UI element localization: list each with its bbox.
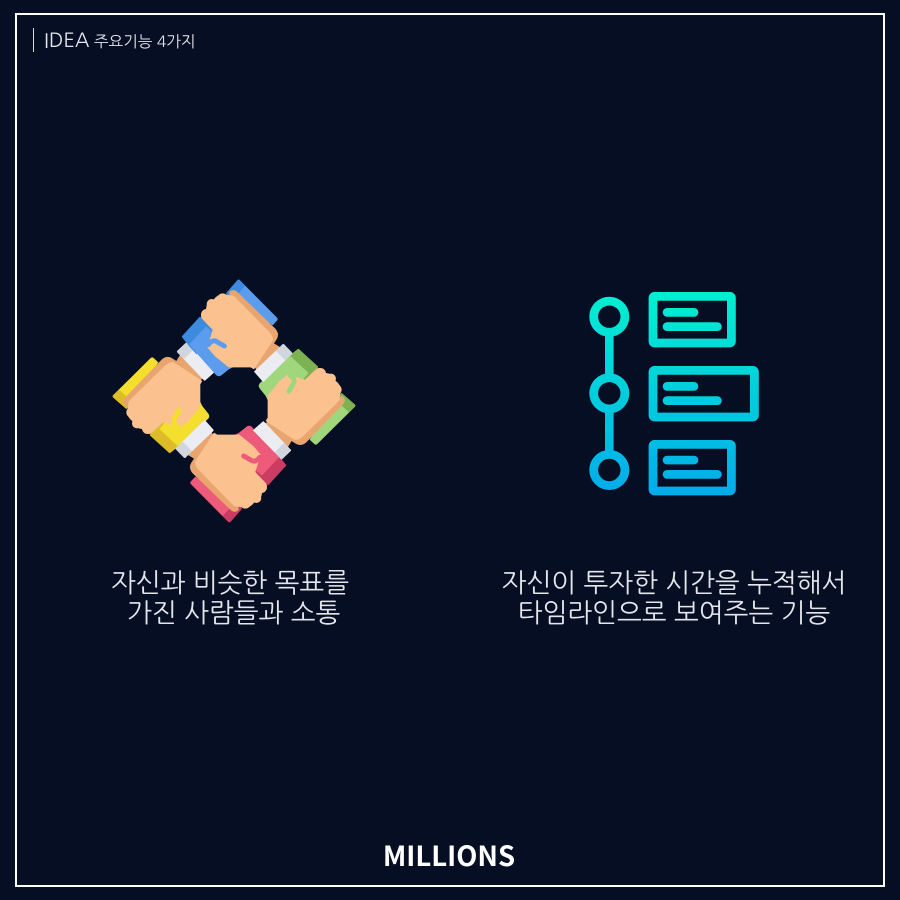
header tick: [33, 28, 34, 52]
left caption: 자신과 비슷한 목표를: [111, 569, 349, 596]
left caption: 가진 사람들과 소통: [127, 599, 340, 626]
brand name: MILLIONS: [383, 834, 515, 874]
right caption: [502, 569, 846, 626]
left caption: [111, 569, 349, 626]
right caption: 타임라인으로 보여주는 기능: [518, 599, 830, 626]
right caption: 자신이 투자한 시간을 누적해서: [502, 569, 846, 596]
header text: IDEA 주요기능 4가지: [44, 30, 196, 50]
